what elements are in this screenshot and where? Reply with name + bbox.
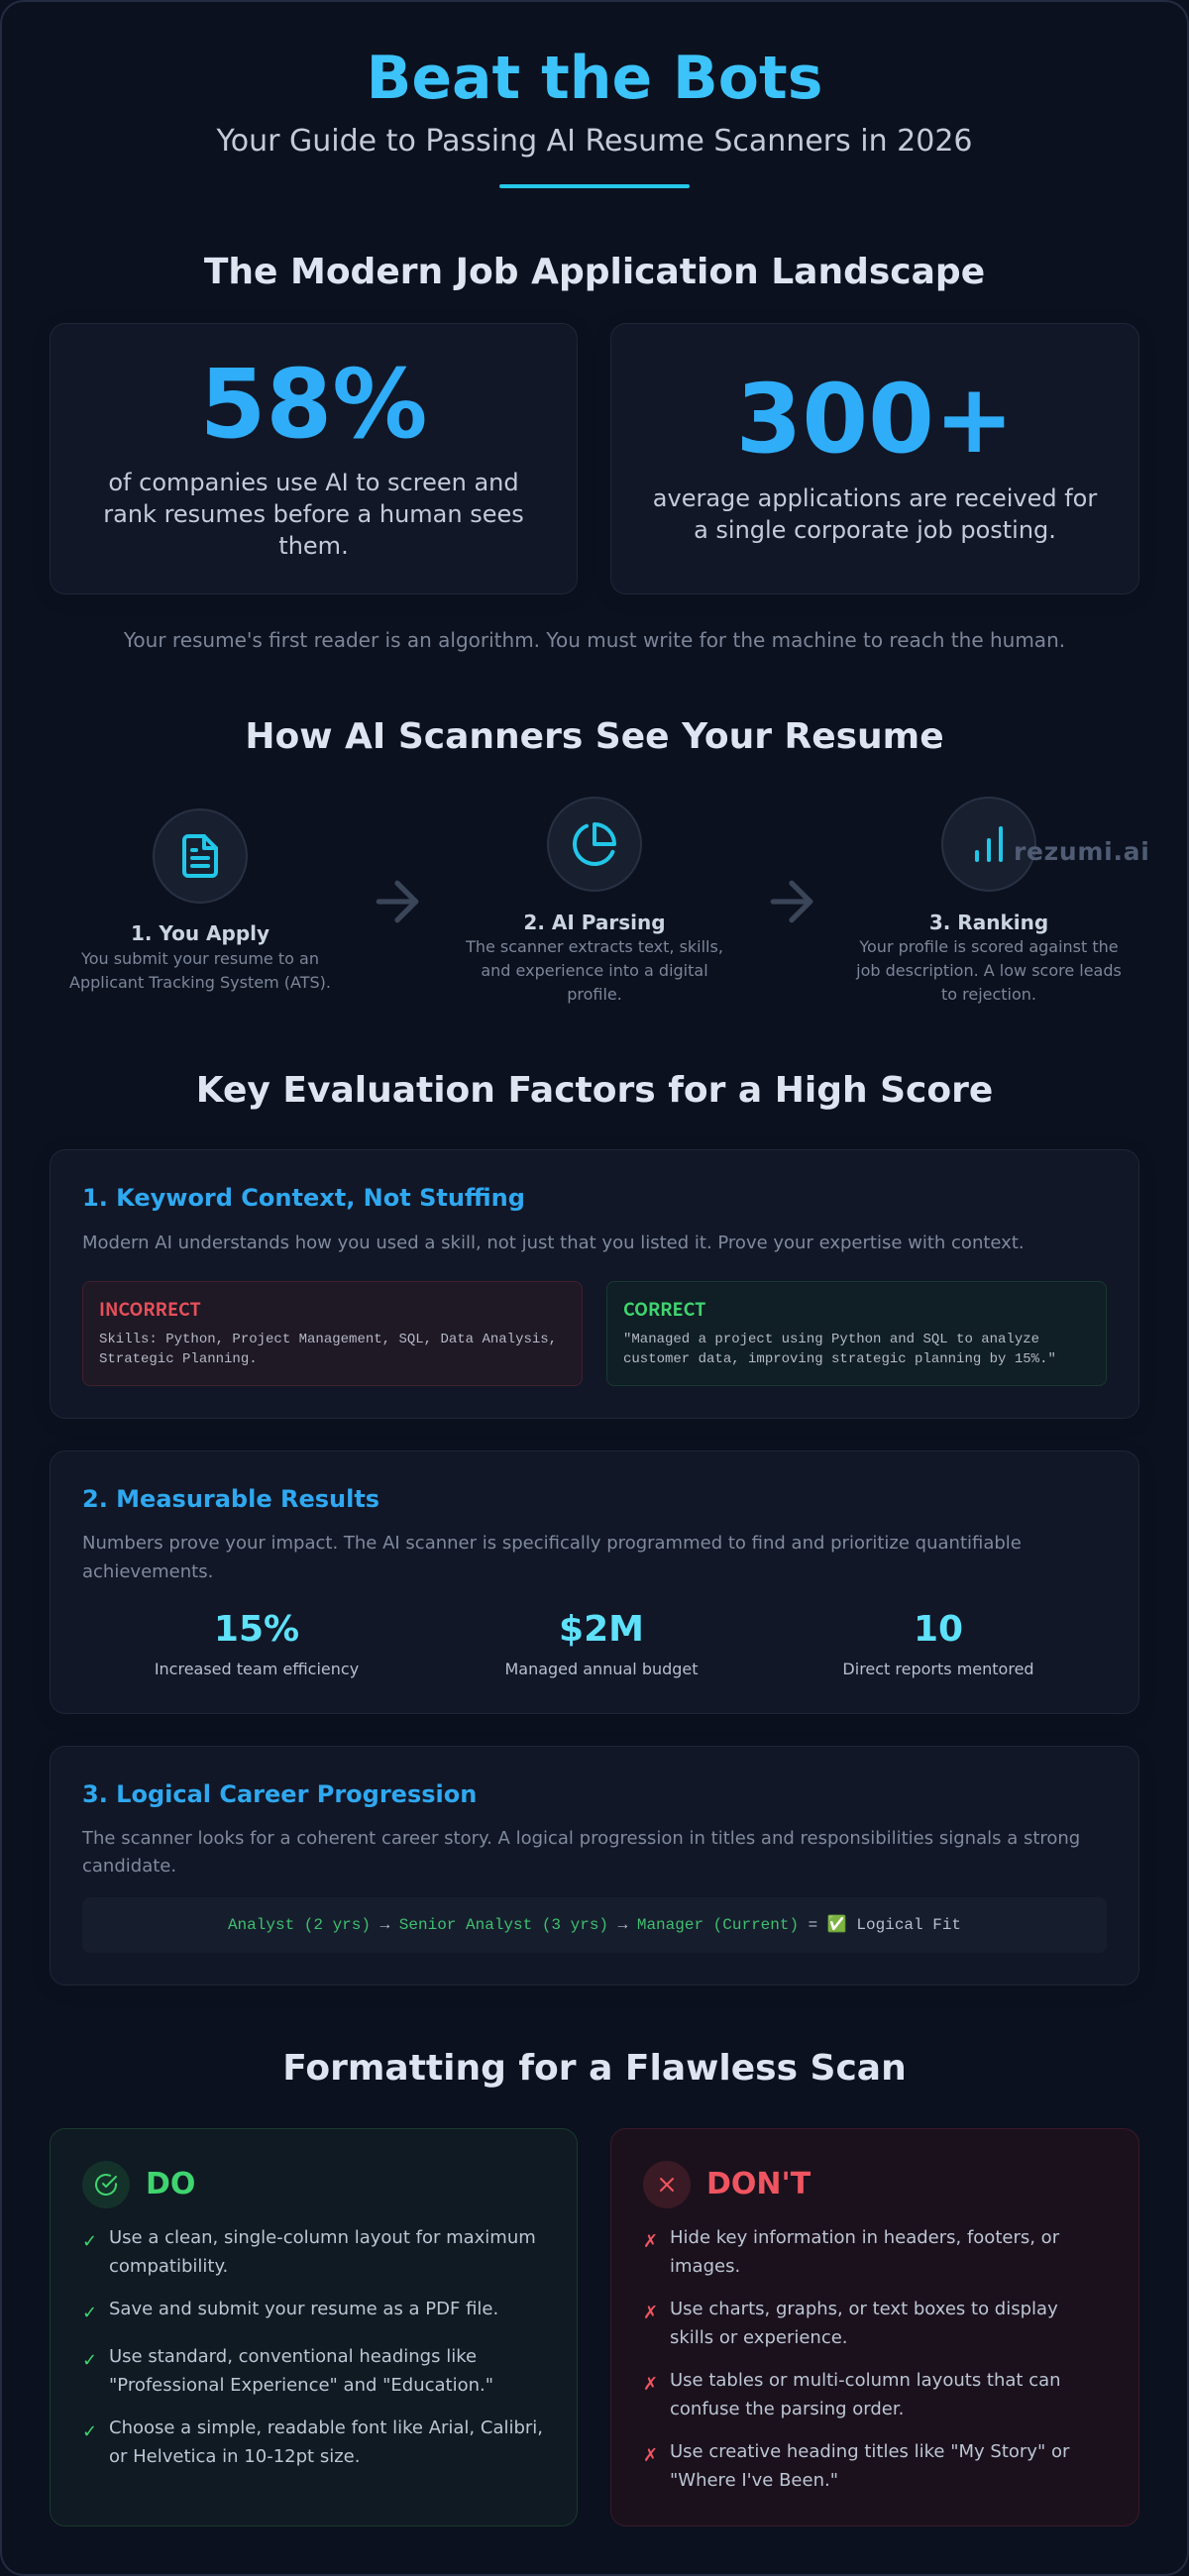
stat text 58%	[103, 469, 524, 560]
career path code box	[82, 1897, 1107, 1953]
step 3 text: Your profile is scored against the	[859, 937, 1119, 955]
panel: measurable results	[50, 1450, 1139, 1714]
incorrect example text: Strategic Planning.	[99, 1351, 258, 1367]
do list: ✓	[82, 2303, 97, 2323]
panel: 300 plus stat	[610, 323, 1139, 594]
heading: how scanners work: How AI Scanners See Your Resume	[245, 715, 944, 757]
step 2 text: profile.	[567, 985, 622, 1003]
step 3 text: job description. A low score leads	[856, 961, 1122, 979]
correct example box	[606, 1281, 1107, 1386]
panel 1 text: Modern AI understands how you used a skill, not just that you listed it. Prove your expertise with context.	[82, 1233, 1025, 1252]
heading: landscape: The Modern Job Application Landscape	[204, 252, 985, 291]
panel 1 heading: 1. Keyword Context, Not Stuffing	[82, 1183, 525, 1211]
career path code box: Analyst (2 yrs) → Senior Analyst (3 yrs) → Manager (Current) = ✅ Logical Fit	[228, 1916, 961, 1934]
panel: 58 percent stat	[50, 323, 578, 594]
metric $2M: $2M	[559, 1609, 644, 1649]
stat number 58%: 58%	[200, 349, 427, 460]
correct label: CORRECT	[623, 1296, 705, 1322]
don't list: ✗	[643, 2231, 658, 2252]
stat number 300+: 300+	[736, 364, 1014, 475]
stat text 58%: of companies use AI to screen and	[108, 469, 519, 496]
metric 10 label: Direct reports mentored	[842, 1660, 1034, 1678]
step 2 text: The scanner extracts text, skills,	[466, 937, 723, 955]
step 2 text: and experience into a digital	[481, 961, 708, 979]
don't list	[643, 2227, 1070, 2491]
icon: document	[153, 808, 248, 904]
panel 3 text	[81, 1828, 1080, 1877]
do list: ✓	[82, 2231, 97, 2252]
incorrect example box	[82, 1281, 583, 1386]
arrow 1	[377, 880, 418, 923]
do list: or Helvetica in 10-12pt size.	[109, 2446, 360, 2467]
panel 2 text: achievements.	[82, 1561, 213, 1582]
don't list: Use charts, graphs, or text boxes to display	[670, 2299, 1058, 2319]
panel: don't	[610, 2128, 1139, 2526]
don't list: ✗	[643, 2445, 658, 2466]
panel 3 text: The scanner looks for a coherent career story. A logical progression in titles and responsibilities signals a strong	[82, 1828, 1080, 1849]
do heading: DO	[146, 2167, 195, 2201]
step 3 title: 3. Ranking	[929, 910, 1048, 933]
step 1 text	[69, 949, 331, 991]
panel 2 text	[82, 1533, 1022, 1582]
icon: pie chart	[547, 797, 642, 892]
step 1 text: You submit your resume to an	[81, 949, 319, 967]
panel: do	[50, 2128, 578, 2526]
correct example text	[623, 1332, 1056, 1367]
do list: ✓	[82, 2421, 97, 2442]
don't list: Use creative heading titles like "My Story" or	[670, 2441, 1069, 2462]
heading: formatting: Formatting for a Flawless Scan	[282, 2048, 907, 2089]
don't list: Use tables or multi-column layouts that can	[670, 2370, 1061, 2391]
do list: Save and submit your resume as a PDF file.	[109, 2299, 498, 2319]
don't list: Hide key information in headers, footers, or	[670, 2227, 1059, 2248]
step 1 text: Applicant Tracking System (ATS).	[69, 973, 331, 991]
title: Beat the Bots	[367, 44, 822, 113]
step 2 title: 2. AI Parsing	[523, 910, 666, 933]
don't list: ✗	[643, 2303, 658, 2323]
step 3 text	[856, 937, 1122, 1003]
do list	[82, 2227, 543, 2467]
panel: keyword context	[50, 1149, 1139, 1419]
stat text 58%: them.	[278, 532, 349, 560]
panel 2 heading: 2. Measurable Results	[82, 1484, 379, 1512]
step 3 text: to rejection.	[941, 985, 1036, 1003]
panel: career progression	[50, 1746, 1139, 1986]
do list: ✓	[82, 2350, 97, 2371]
landscape takeaway: Your resume's first reader is an algorithm. You must write for the machine to reach the human.	[124, 628, 1065, 652]
stat text 58%: rank resumes before a human sees	[103, 500, 524, 528]
don't list: ✗	[643, 2374, 658, 2395]
metric 15% label: Increased team efficiency	[155, 1660, 359, 1678]
metric $2M label: Managed annual budget	[504, 1660, 699, 1678]
correct example text: customer data, improving strategic planning by 15%."	[623, 1351, 1056, 1367]
do list: compatibility.	[109, 2256, 228, 2277]
icon: check circle	[82, 2161, 130, 2208]
icon: bar chart	[941, 797, 1036, 892]
panel 3 heading: 3. Logical Career Progression	[82, 1780, 477, 1808]
do list: Use a clean, single-column layout for maximum	[109, 2227, 536, 2248]
stat text 300+: average applications are received for	[653, 484, 1097, 512]
metric 10: 10	[914, 1609, 963, 1649]
don't heading: DON'T	[706, 2167, 811, 2201]
watermark: rezumi.ai	[1014, 836, 1149, 866]
icon: x circle	[643, 2161, 691, 2208]
metric 15%: 15%	[214, 1609, 299, 1649]
don't list: confuse the parsing order.	[670, 2399, 904, 2419]
correct example text: "Managed a project using Python and SQL to analyze	[623, 1332, 1039, 1347]
step 1 title: 1. You Apply	[131, 921, 270, 945]
do list: Choose a simple, readable font like Arial, Calibri,	[109, 2417, 543, 2438]
incorrect example text	[99, 1332, 557, 1367]
title underline	[499, 184, 690, 188]
do list: "Professional Experience" and "Education."	[109, 2375, 493, 2396]
do list: Use standard, conventional headings like	[109, 2346, 477, 2367]
stat text 300+	[653, 484, 1098, 544]
incorrect example text: Skills: Python, Project Management, SQL, Data Analysis,	[99, 1332, 557, 1347]
subtitle: Your Guide to Passing AI Resume Scanners in 2026	[216, 124, 973, 159]
panel 3 text: candidate.	[82, 1856, 176, 1877]
panel 2 text: Numbers prove your impact. The AI scanner is specifically programmed to find and prioritize quantifiable	[82, 1533, 1022, 1554]
stat text 300+: a single corporate job posting.	[694, 516, 1056, 544]
heading: evaluation factors: Key Evaluation Factors for a High Score	[196, 1070, 993, 1110]
don't list: skills or experience.	[670, 2327, 848, 2348]
step 2 text	[466, 937, 723, 1003]
incorrect label: INCORRECT	[99, 1296, 201, 1322]
don't list: images.	[670, 2256, 740, 2277]
don't list: "Where I've Been."	[670, 2470, 838, 2491]
arrow 2	[771, 880, 812, 923]
